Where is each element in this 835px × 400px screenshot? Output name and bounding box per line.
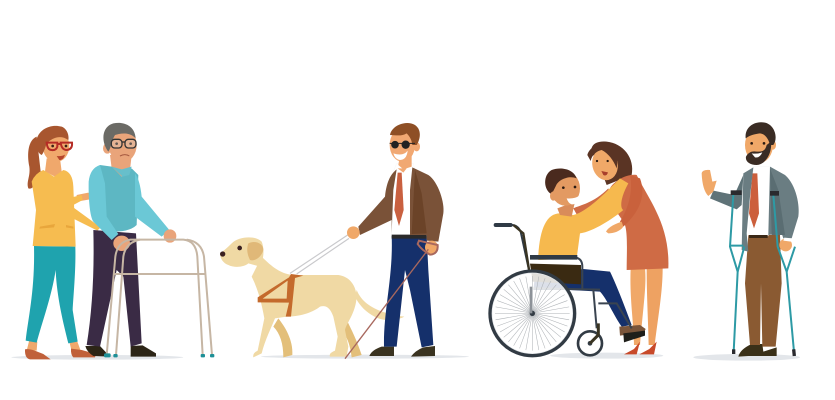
right crutch xyxy=(770,193,795,356)
harness xyxy=(258,274,303,317)
floor shadow xyxy=(261,355,469,359)
rear wheel xyxy=(490,271,575,356)
man's glasses xyxy=(111,139,136,148)
walking frame xyxy=(107,240,212,355)
front castor wheel xyxy=(578,323,602,355)
group: man on crutches waving xyxy=(693,122,800,361)
seated man xyxy=(530,168,646,336)
group: woman helping man with walker xyxy=(11,123,214,360)
man with walker xyxy=(85,123,176,357)
floor shadow xyxy=(11,355,183,360)
blind man xyxy=(347,123,444,357)
standing woman xyxy=(573,141,668,354)
white cane xyxy=(345,241,438,359)
floor shadow xyxy=(693,354,800,361)
walker feet xyxy=(104,353,214,357)
wheelchair xyxy=(490,255,645,356)
group: blind man with guide dog xyxy=(220,123,469,359)
woman with glasses xyxy=(25,126,101,359)
woman's glasses xyxy=(47,143,72,150)
dark glasses xyxy=(390,141,415,148)
left crutch xyxy=(730,193,744,354)
guide dog xyxy=(220,237,404,357)
harness handle xyxy=(290,235,349,274)
floor shadow xyxy=(550,353,663,359)
man with beard xyxy=(702,122,799,357)
wheelchair rear parts xyxy=(496,225,529,272)
group: woman hugging man in wheelchair xyxy=(490,141,668,359)
